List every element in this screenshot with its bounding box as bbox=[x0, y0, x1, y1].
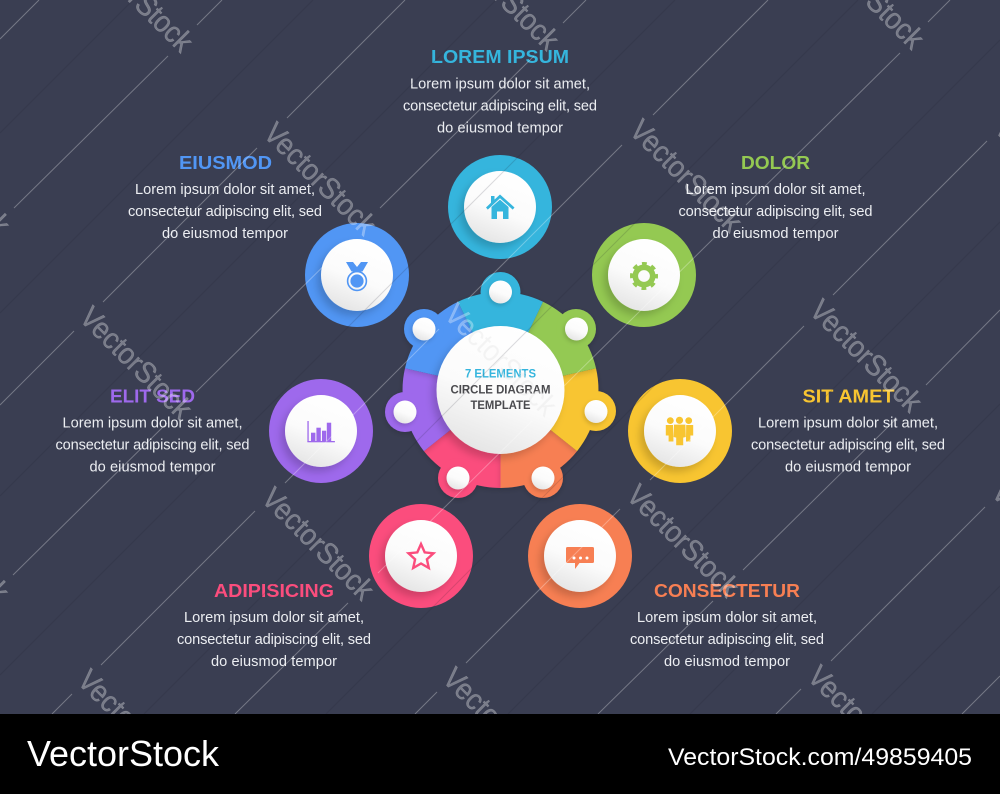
label: Adipisicing: consectetur adipiscing elit, sed bbox=[177, 632, 371, 648]
label: Elit Sed: ELIT SED bbox=[110, 386, 195, 406]
label: Adipisicing: ADIPISICING bbox=[214, 580, 334, 601]
segment: purple bbox=[385, 368, 500, 451]
label: Lorem Ipsum: LOREM IPSUM bbox=[431, 46, 569, 67]
segment: green bbox=[500, 302, 596, 390]
icon: house bbox=[486, 194, 514, 219]
node: blue medal bbox=[305, 223, 409, 327]
label: Sit Amet: consectetur adipiscing elit, sed bbox=[751, 438, 945, 454]
watermark text pattern: VectorStock bbox=[620, 479, 746, 604]
label: Lorem Ipsum bbox=[403, 46, 597, 136]
node: purple chart bbox=[269, 379, 373, 483]
center circle with title: CIRCLE DIAGRAM bbox=[450, 384, 550, 396]
label: Consectetur: do eiusmod tempor bbox=[664, 654, 790, 670]
watermark text pattern: VectorStock bbox=[623, 114, 749, 239]
label: Consectetur: CONSECTETUR bbox=[654, 580, 800, 601]
central segmented ring bbox=[385, 272, 616, 498]
label: Eiusmod: consectetur adipiscing elit, sed bbox=[128, 204, 322, 220]
label: Adipisicing: Lorem ipsum dolor sit amet, bbox=[184, 610, 364, 626]
node: yellow people bbox=[628, 379, 732, 483]
icon: bar chart bbox=[307, 421, 335, 442]
label: Elit Sed: do eiusmod tempor bbox=[90, 460, 216, 476]
watermark text pattern: VectorStock bbox=[73, 301, 199, 426]
icon: gear bbox=[632, 264, 656, 288]
node: orange chat bbox=[528, 504, 632, 608]
center circle with title: 7 ELEMENTS bbox=[465, 369, 536, 381]
watermark text pattern: VectorStock bbox=[801, 660, 927, 785]
label: Eiusmod: EIUSMOD bbox=[179, 152, 272, 173]
segment: yellow bbox=[500, 368, 616, 451]
segment: orange bbox=[500, 390, 577, 498]
icon: star bbox=[408, 544, 434, 568]
label: Eiusmod: do eiusmod tempor bbox=[162, 226, 288, 242]
label: Lorem Ipsum: Lorem ipsum dolor sit amet, bbox=[410, 76, 590, 92]
label: Eiusmod bbox=[128, 152, 322, 242]
segment: pink bbox=[424, 390, 500, 498]
label: Lorem Ipsum: do eiusmod tempor bbox=[437, 120, 563, 136]
segment: teal bbox=[458, 272, 543, 390]
watermark text pattern: VectorStock bbox=[255, 482, 381, 607]
label: Dolor: Lorem ipsum dolor sit amet, bbox=[686, 182, 866, 198]
label: Sit Amet bbox=[751, 386, 945, 476]
label: Sit Amet: Lorem ipsum dolor sit amet, bbox=[758, 416, 938, 432]
label: Eiusmod: Lorem ipsum dolor sit amet, bbox=[135, 182, 315, 198]
label: Elit Sed: Lorem ipsum dolor sit amet, bbox=[62, 416, 242, 432]
label: Adipisicing bbox=[177, 580, 371, 670]
label: Consectetur bbox=[630, 580, 824, 670]
center circle with title bbox=[436, 326, 564, 454]
label: Dolor: consectetur adipiscing elit, sed bbox=[678, 204, 872, 220]
label: Elit Sed bbox=[56, 386, 250, 476]
icon: speech bubble bbox=[566, 547, 594, 569]
footer url: VectorStock.com/49859405 bbox=[668, 744, 972, 771]
icon: medal bbox=[346, 262, 368, 290]
icon: people bbox=[666, 417, 693, 445]
watermark text pattern: VectorStock bbox=[438, 298, 564, 423]
label: Sit Amet: SIT AMET bbox=[802, 386, 895, 406]
label: Elit Sed: consectetur adipiscing elit, sed bbox=[56, 438, 250, 454]
watermark text pattern: VectorStock bbox=[803, 294, 929, 419]
label: Lorem Ipsum: consectetur adipiscing elit, sed bbox=[403, 98, 597, 114]
footer bar bbox=[0, 714, 1000, 794]
label: Consectetur: consectetur adipiscing elit, sed bbox=[630, 632, 824, 648]
node: teal home bbox=[448, 155, 552, 259]
center circle with title: TEMPLATE bbox=[470, 400, 531, 412]
label: Dolor: do eiusmod tempor bbox=[712, 226, 839, 242]
label: Consectetur: Lorem ipsum dolor sit amet, bbox=[637, 610, 817, 626]
ring connector dots bbox=[394, 280, 608, 490]
label: Adipisicing: do eiusmod tempor bbox=[211, 654, 337, 670]
node: pink star bbox=[369, 504, 473, 608]
label: Sit Amet: do eiusmod tempor bbox=[785, 460, 911, 476]
footer logo: VectorStock bbox=[27, 733, 220, 774]
label: Dolor: DOLOR bbox=[741, 152, 810, 173]
segment: blue bbox=[404, 302, 500, 390]
watermark text pattern: VectorStock bbox=[257, 117, 383, 242]
label: Dolor bbox=[678, 152, 872, 242]
infographic canvas: VectorStock bbox=[438, 298, 564, 423]
node: green gear bbox=[592, 223, 696, 327]
